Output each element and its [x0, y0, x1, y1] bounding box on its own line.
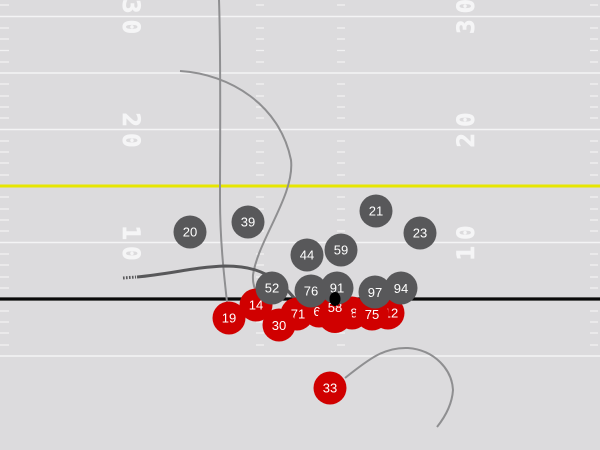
dashed path start	[123, 277, 136, 278]
route: wheel from 30	[180, 71, 291, 305]
left yard number 10: 10	[117, 226, 145, 267]
defense player 94: 94	[394, 281, 408, 296]
defense player 23: 23	[413, 226, 427, 240]
defense player 94	[384, 272, 418, 304]
defense player 91: 91	[330, 280, 344, 296]
offense player 6	[302, 294, 336, 328]
defense player 44	[290, 238, 324, 272]
offense player 33	[314, 372, 346, 404]
line of scrimmage	[0, 297, 600, 301]
offense player 30	[262, 308, 296, 342]
route: receiver 19 deep	[219, 0, 227, 302]
offense player 19	[212, 302, 246, 334]
offense player 12	[372, 296, 404, 330]
defense player 21	[360, 194, 392, 228]
defense player 97: 97	[368, 285, 382, 300]
offense player 8: 8	[350, 306, 358, 320]
first down line	[0, 184, 600, 188]
defense player 20: 20	[183, 224, 197, 240]
offense player 71	[280, 298, 314, 330]
defense player 91	[320, 272, 354, 304]
left yard number 30: 30	[117, 0, 145, 40]
left yard number 20: 20	[117, 112, 145, 154]
defense player 23	[404, 216, 436, 250]
offense player 75	[356, 298, 388, 330]
offense player 75: 75	[365, 307, 379, 322]
defense player 52	[256, 272, 288, 304]
ball carrier path	[137, 266, 296, 300]
defense player 76	[294, 274, 328, 308]
offense player 14: 14	[249, 298, 263, 312]
offense player 6: 6	[313, 304, 321, 319]
offense player 8	[336, 296, 368, 330]
offense player 30: 30	[272, 318, 286, 333]
defense player 52: 52	[265, 280, 279, 296]
defense player 97	[358, 276, 392, 308]
offense player 71: 71	[291, 306, 305, 322]
defense player 76: 76	[304, 284, 318, 298]
right yard number 10: 10	[452, 219, 480, 260]
defense player 59	[324, 234, 358, 266]
offense player 58	[318, 299, 352, 333]
right yard number 20: 20	[452, 106, 480, 148]
defense player 44: 44	[300, 248, 314, 262]
defense player 39	[232, 206, 264, 238]
offense player 14	[240, 288, 272, 322]
offense player 58: 58	[328, 300, 342, 315]
defense player 59: 59	[334, 242, 348, 258]
offense player 33: 33	[323, 380, 337, 396]
defense player 39: 39	[241, 214, 255, 230]
route: back 33	[345, 348, 453, 427]
defense player 21: 21	[369, 204, 383, 218]
defense player 20	[174, 216, 206, 248]
offense player 12: 12	[384, 306, 398, 320]
football	[330, 292, 340, 306]
offense player 19: 19	[222, 310, 236, 326]
